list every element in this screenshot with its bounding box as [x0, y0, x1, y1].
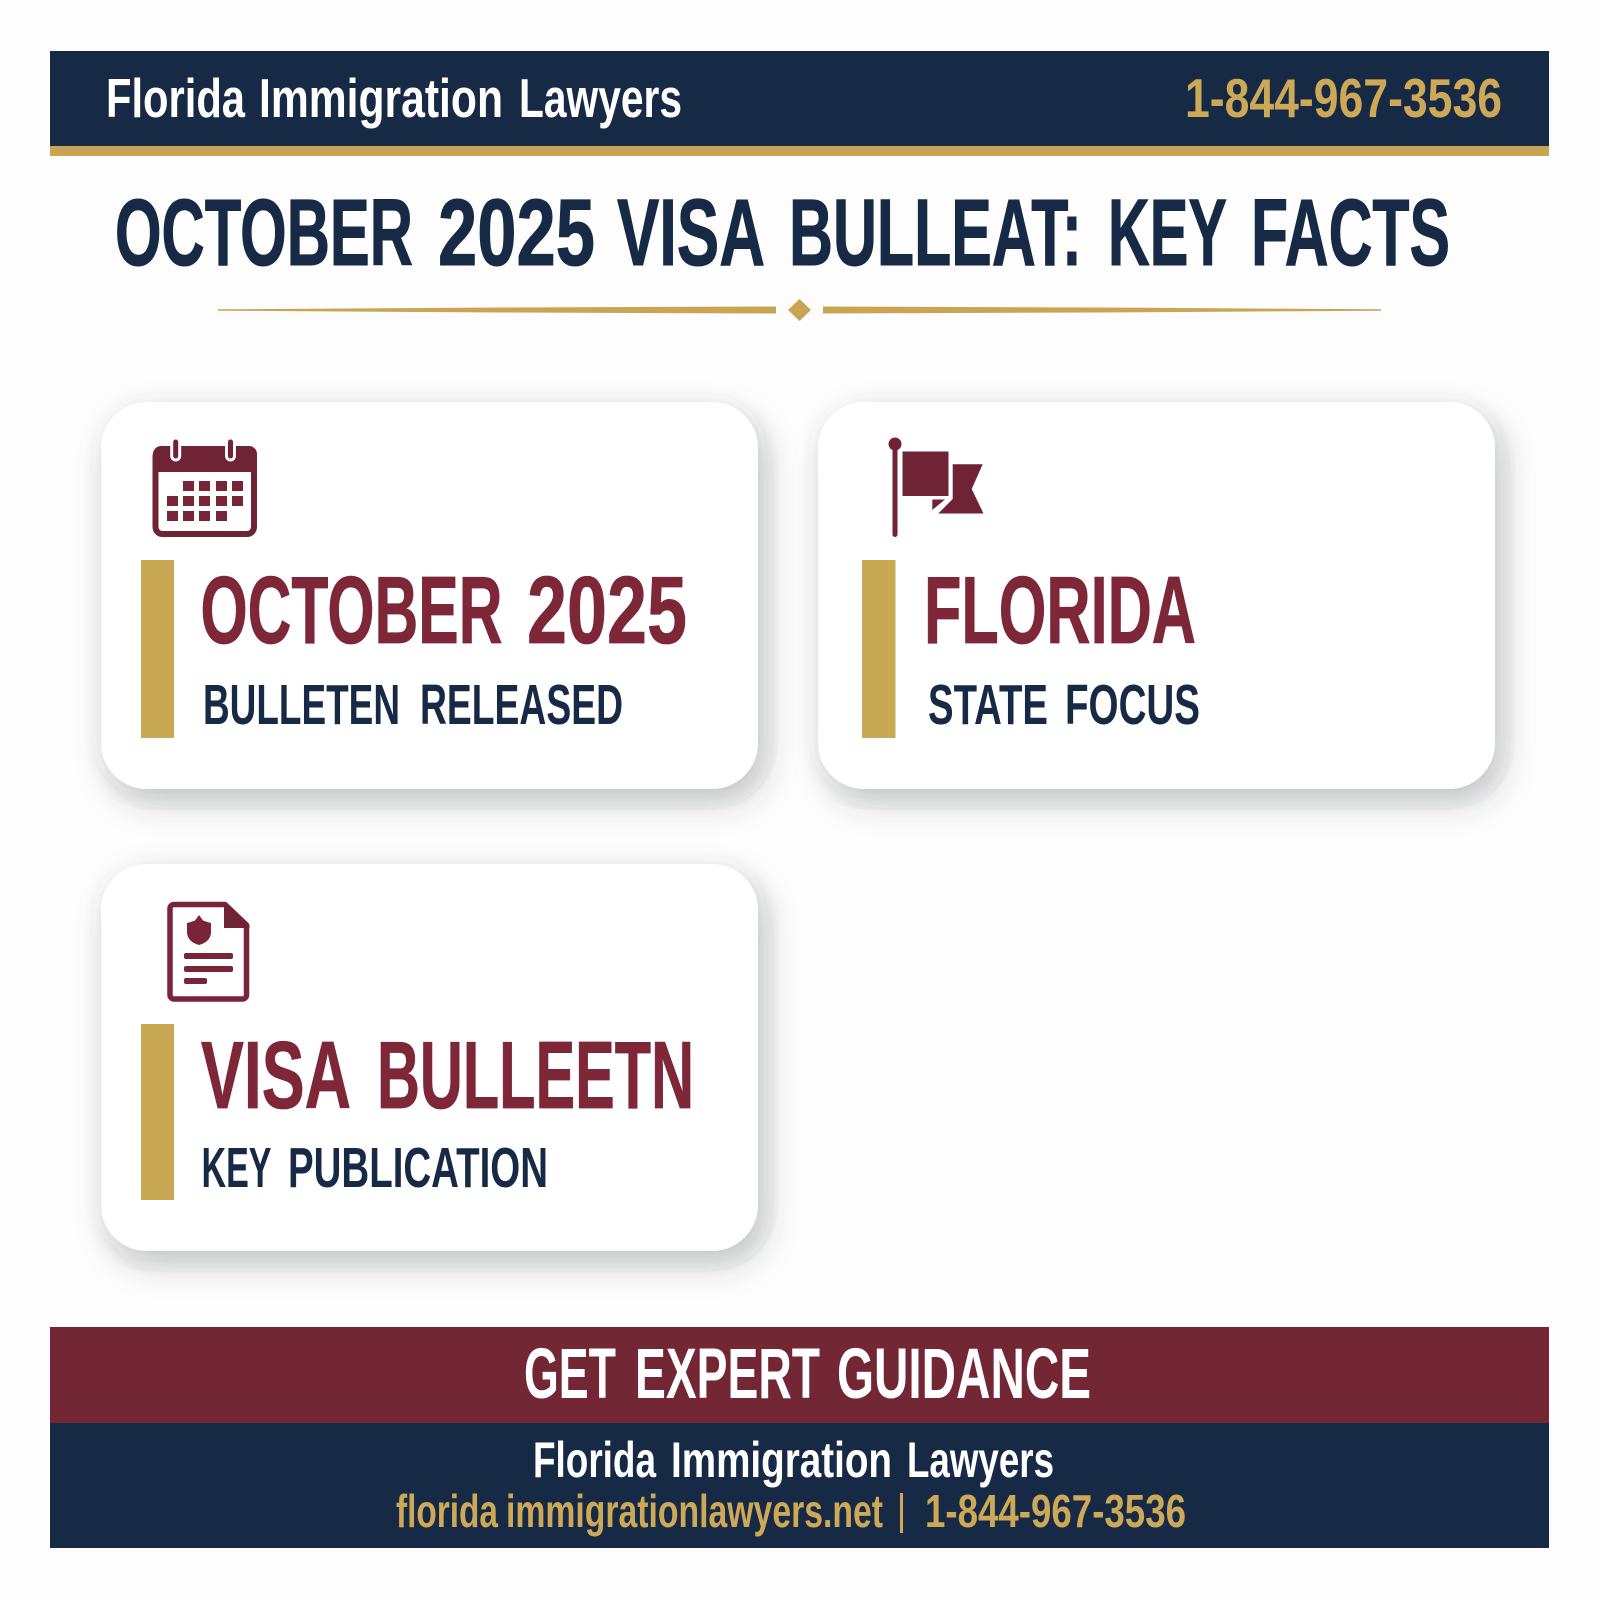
title divider with diamond — [218, 299, 1381, 321]
card subheading: RELEASED — [420, 673, 623, 737]
title: VISA — [617, 180, 765, 286]
footer contact band — [50, 1423, 1549, 1548]
panel: october 2025 — [101, 402, 758, 789]
call to action text — [524, 1335, 1091, 1414]
card heading: 2025 — [527, 557, 687, 664]
call to action text: GET — [524, 1335, 616, 1414]
footer separator — [900, 1493, 903, 1533]
card heading: BULLEETN — [377, 1022, 694, 1129]
card subheading: BULLETEN — [203, 673, 400, 737]
gold accent bar — [141, 560, 174, 738]
call to action text: GUIDANCE — [837, 1335, 1091, 1414]
panel: florida — [818, 402, 1495, 789]
header firm name: Lawyers — [519, 67, 682, 129]
title: FACTS — [1251, 180, 1450, 286]
header firm name — [106, 67, 682, 129]
header phone number: 1-844-967-3536 — [1185, 67, 1502, 129]
footer firm name: Florida — [533, 1432, 657, 1488]
card heading: OCTOBER — [200, 557, 502, 664]
footer phone number: 1-844-967-3536 — [925, 1485, 1186, 1537]
title: 2025 — [438, 180, 595, 286]
title: BULLEAT: — [789, 180, 1082, 286]
footer firm name: Lawyers — [907, 1432, 1054, 1488]
card subheading: STATE — [928, 673, 1048, 737]
card heading — [201, 1022, 694, 1129]
icon: calendar — [153, 442, 257, 534]
card subheading: PUBLICATION — [288, 1136, 548, 1200]
header firm name: Immigration — [259, 67, 503, 129]
header firm name: Florida — [106, 67, 245, 129]
card heading: FLORIDA — [924, 557, 1196, 664]
footer website — [396, 1485, 883, 1537]
card heading: VISA — [201, 1022, 351, 1129]
title: OCTOBER — [115, 180, 413, 286]
gold accent bar — [862, 560, 896, 738]
footer firm name: Immigration — [671, 1432, 892, 1488]
footer call to action band — [50, 1327, 1549, 1423]
call to action text: EXPERT — [635, 1335, 820, 1414]
panel: visa bulletin — [101, 864, 758, 1251]
card subheading — [928, 673, 1200, 737]
card subheading — [202, 1136, 548, 1200]
gold accent bar — [141, 1024, 174, 1200]
title — [115, 180, 1450, 286]
card subheading: KEY — [202, 1136, 272, 1200]
title: KEY — [1108, 180, 1227, 286]
header bar — [50, 51, 1549, 156]
footer website: immigrationlawyers.net — [506, 1485, 883, 1537]
card subheading: FOCUS — [1065, 673, 1200, 737]
footer website: florida — [396, 1485, 498, 1537]
icon: flag — [888, 438, 984, 537]
footer firm name — [533, 1432, 1054, 1488]
icon: document — [170, 902, 250, 999]
